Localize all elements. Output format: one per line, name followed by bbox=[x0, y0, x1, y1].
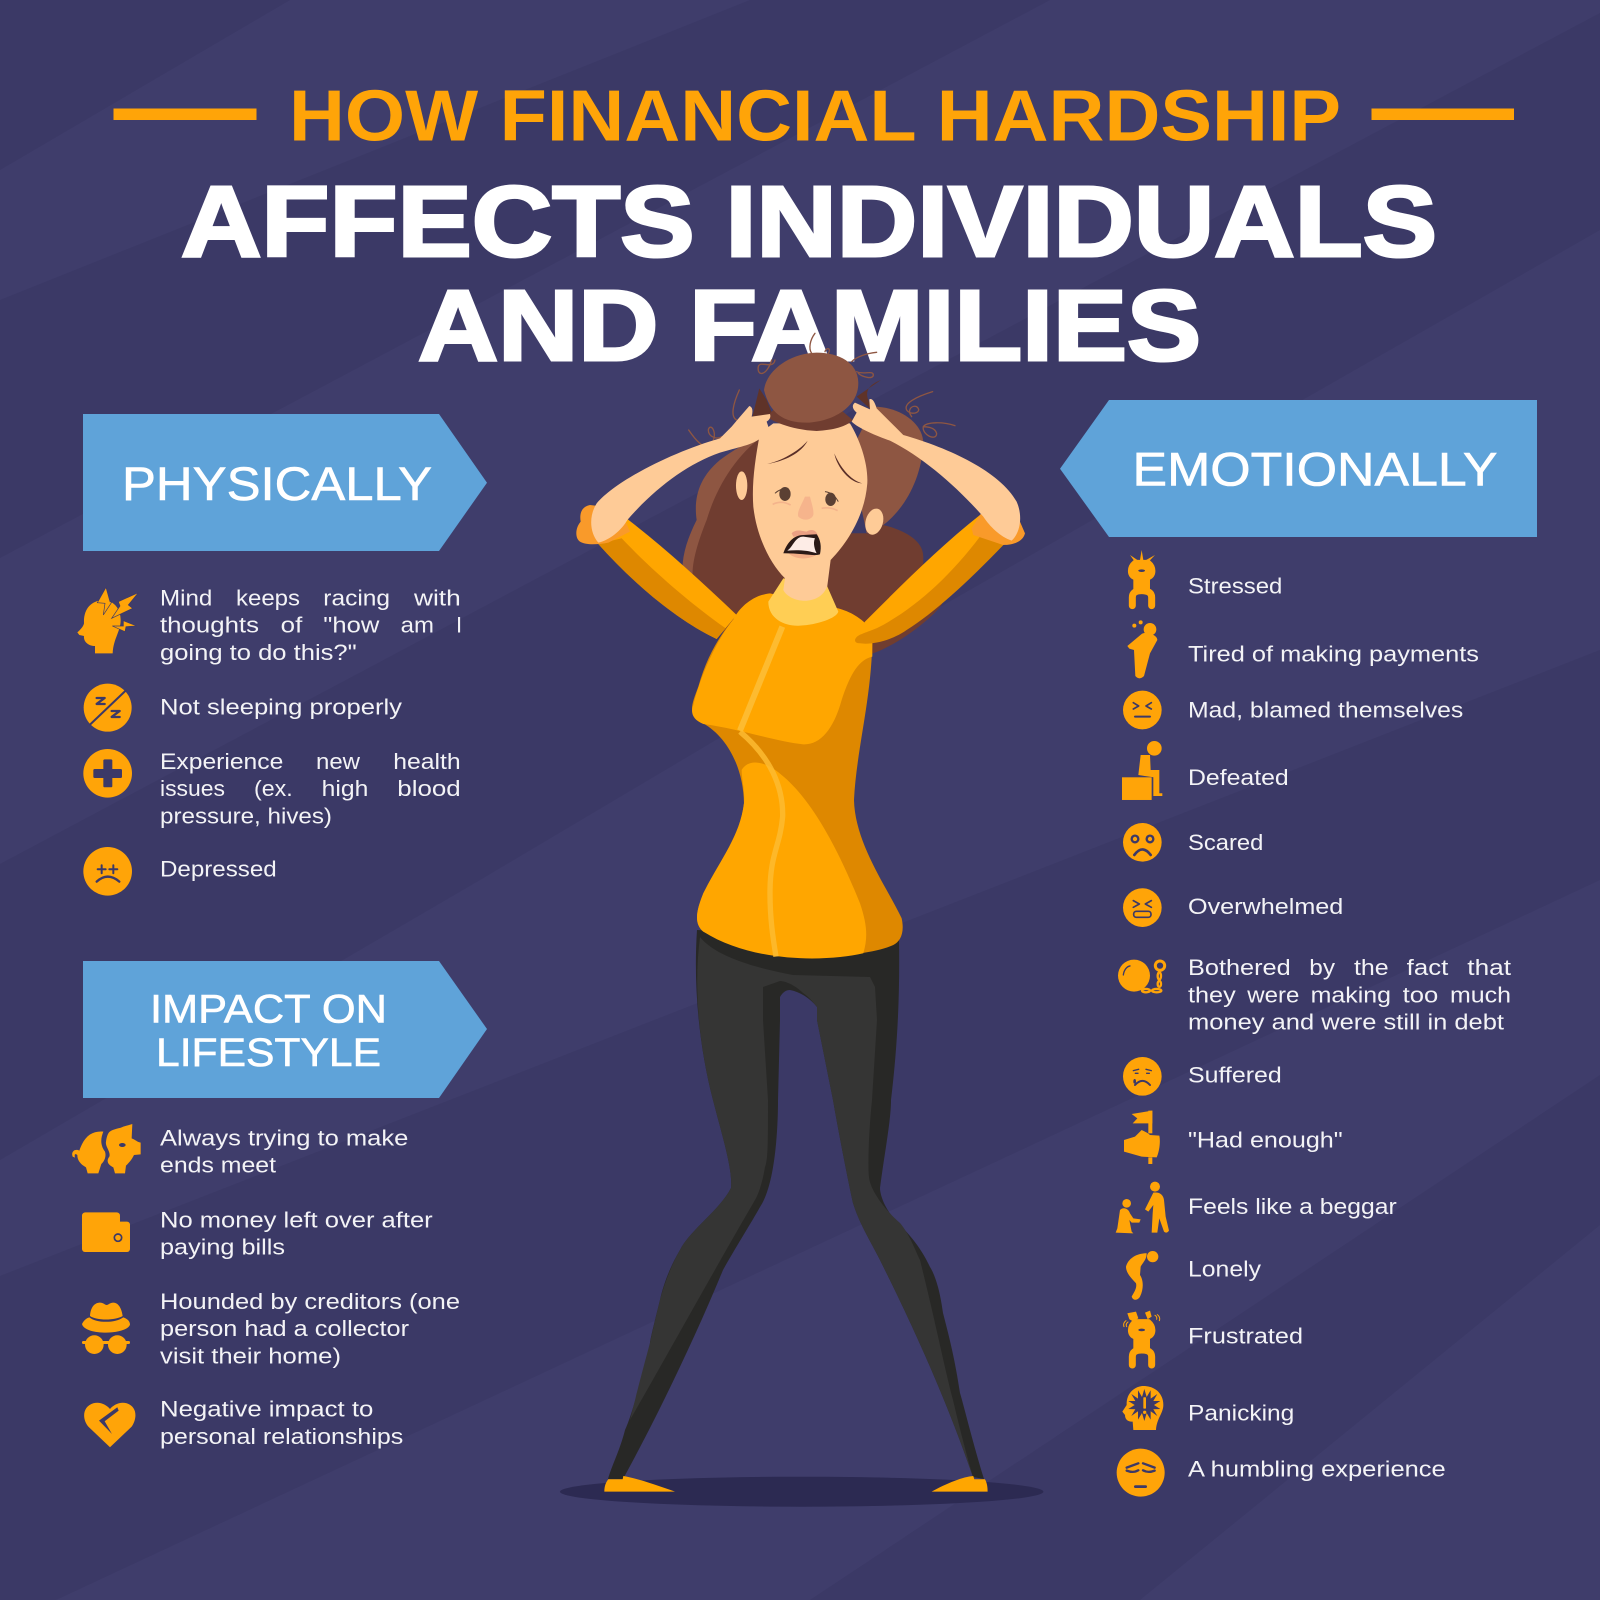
text: new health issues: issues bbox=[160, 776, 225, 801]
text: overwhelmed: Overwhelmed bbox=[1188, 894, 1343, 919]
text: hounded by creditors: Hounded by creditors (one bbox=[160, 1289, 460, 1314]
text: bothered by the fact: making bbox=[1311, 982, 1391, 1007]
text: mind keeps racing: I bbox=[456, 613, 462, 638]
text: frustrated: Frustrated bbox=[1188, 1323, 1303, 1348]
text: negative impact bbox=[160, 1397, 403, 1449]
icon: health cross bbox=[83, 749, 132, 798]
banner: emotionally: EMOTIONALLY bbox=[1132, 443, 1498, 496]
text: bothered by the fact: were bbox=[1246, 982, 1299, 1007]
text: new health issues: health bbox=[393, 749, 461, 774]
text: hounded by creditors: visit their home) bbox=[160, 1343, 341, 1368]
text: ends meet: ends meet bbox=[160, 1153, 276, 1178]
text: no money left bbox=[160, 1207, 433, 1259]
icon: humbled face bbox=[1117, 1449, 1165, 1497]
icon: scared face bbox=[1123, 823, 1162, 862]
banner: physically: PHYSICALLY bbox=[122, 457, 432, 510]
text: new health issues: pressure, hives) bbox=[160, 803, 332, 828]
text: ends meet bbox=[160, 1126, 408, 1178]
text: bothered by the fact: by bbox=[1309, 955, 1335, 980]
icon: tired figure bbox=[1127, 620, 1157, 678]
text: negative impact: personal relationships bbox=[160, 1424, 403, 1449]
icon: frustrated figure bbox=[1124, 1311, 1160, 1365]
icon: defeated figure on box bbox=[1122, 741, 1162, 800]
illustration: stressed woman bbox=[560, 333, 1043, 1507]
banner: impact on lifestyle: LIFESTYLE bbox=[156, 1031, 381, 1075]
text: mind keeps racing: with bbox=[413, 586, 461, 611]
text: mind keeps racing: Mind bbox=[160, 586, 212, 611]
hair back bbox=[682, 407, 942, 653]
icon: panicking head bbox=[1122, 1386, 1163, 1430]
text: mind keeps racing: going to do this?" bbox=[160, 640, 357, 665]
leggings bbox=[608, 930, 984, 1479]
left sleeve bbox=[598, 519, 737, 639]
text: new health issues: new bbox=[316, 749, 360, 774]
title: AND FAMILIES bbox=[418, 270, 1201, 382]
text: bothered by the fact bbox=[1188, 955, 1511, 1034]
text: stressed: Stressed bbox=[1188, 573, 1282, 598]
text: negative impact: Negative impact to bbox=[160, 1397, 373, 1422]
text: bothered by the fact: much bbox=[1450, 982, 1511, 1007]
right sleeve bbox=[855, 515, 1003, 644]
banner: physically bbox=[83, 414, 487, 551]
icon: broken heart bbox=[84, 1403, 135, 1447]
text: mind keeps racing: "how bbox=[323, 613, 379, 638]
text: mind keeps racing: am bbox=[401, 613, 434, 638]
text: new health issues: high bbox=[322, 776, 368, 801]
icon: wallet bbox=[82, 1212, 130, 1252]
icon: stressed figure bbox=[1130, 550, 1155, 606]
text: mad: Mad, blamed themselves bbox=[1188, 698, 1463, 723]
cuffs and arms bbox=[576, 399, 1025, 545]
icon: not sleeping bbox=[84, 684, 132, 732]
icon: ball and chain bbox=[1118, 960, 1165, 992]
title bbox=[114, 76, 1514, 382]
icon: lonely figure bbox=[1126, 1251, 1158, 1300]
banner: emotionally bbox=[1060, 400, 1537, 537]
ground shadow bbox=[560, 1477, 1043, 1507]
text: hounded by creditors bbox=[160, 1289, 460, 1368]
banner: impact on lifestyle bbox=[83, 961, 487, 1098]
text: lonely: Lonely bbox=[1188, 1257, 1261, 1282]
head and face bbox=[736, 423, 886, 601]
panel: emotionally list bbox=[1116, 550, 1511, 1497]
text: new health issues bbox=[160, 749, 461, 828]
text: new health issues: (ex. bbox=[254, 776, 293, 801]
text: mind keeps racing: of bbox=[281, 613, 303, 638]
text: bothered by the fact: money and were still in debt bbox=[1188, 1009, 1504, 1034]
text: mind keeps racing: thoughts bbox=[160, 613, 259, 638]
text: bothered by the fact: they bbox=[1188, 982, 1236, 1007]
icon: suffered face bbox=[1123, 1057, 1162, 1096]
icon: beggar and passer-by bbox=[1116, 1182, 1169, 1233]
text: mind keeps racing: racing bbox=[323, 586, 390, 611]
title: AFFECTS INDIVIDUALS bbox=[181, 166, 1437, 278]
panel: physically list bbox=[77, 586, 462, 896]
icon: collector with hat and glasses bbox=[82, 1303, 130, 1354]
text: new health issues: Experience bbox=[160, 749, 283, 774]
banner: impact on lifestyle: IMPACT ON bbox=[150, 988, 387, 1032]
text: defeated: Defeated bbox=[1188, 765, 1289, 790]
icon: head with lightning bbox=[77, 587, 138, 653]
text: suffered: Suffered bbox=[1188, 1063, 1282, 1088]
shoes bbox=[604, 1476, 988, 1492]
panel: lifestyle list bbox=[72, 1124, 460, 1449]
sweater bbox=[692, 578, 903, 958]
text: beggar: Feels like a beggar bbox=[1188, 1194, 1397, 1219]
icon: hand holding flag bbox=[1124, 1111, 1160, 1164]
text: bothered by the fact: Bothered bbox=[1188, 955, 1291, 980]
text: depressed: Depressed bbox=[160, 857, 277, 882]
text: bothered by the fact: too bbox=[1403, 982, 1438, 1007]
icon: depressed face bbox=[83, 847, 132, 896]
text: panicking: Panicking bbox=[1188, 1401, 1294, 1426]
text: scared: Scared bbox=[1188, 830, 1263, 855]
icon: broken piggy bank bbox=[72, 1124, 141, 1173]
title: HOW FINANCIAL HARDSHIP bbox=[289, 76, 1341, 156]
text: mind keeps racing bbox=[160, 586, 462, 665]
text: ends meet: Always trying to make bbox=[160, 1126, 408, 1151]
text: tired of making payments: Tired of making payments bbox=[1188, 642, 1479, 667]
text: no money left: No money left over after bbox=[160, 1207, 433, 1232]
text: no money left: paying bills bbox=[160, 1234, 285, 1259]
text: had enough: "Had enough" bbox=[1188, 1128, 1343, 1153]
pulled hair clump bbox=[689, 333, 955, 447]
icon: mad face bbox=[1123, 691, 1162, 729]
text: bothered by the fact: fact bbox=[1407, 955, 1448, 980]
text: mind keeps racing: keeps bbox=[236, 586, 300, 611]
text: bothered by the fact: that bbox=[1467, 955, 1511, 980]
text: humbling experience: A humbling experience bbox=[1188, 1457, 1446, 1482]
text: not sleeping properly: Not sleeping properly bbox=[160, 694, 402, 719]
text: bothered by the fact: the bbox=[1354, 955, 1389, 980]
icon: overwhelmed face bbox=[1123, 888, 1162, 927]
text: hounded by creditors: person had a collector bbox=[160, 1316, 409, 1341]
text: new health issues: blood bbox=[397, 776, 461, 801]
